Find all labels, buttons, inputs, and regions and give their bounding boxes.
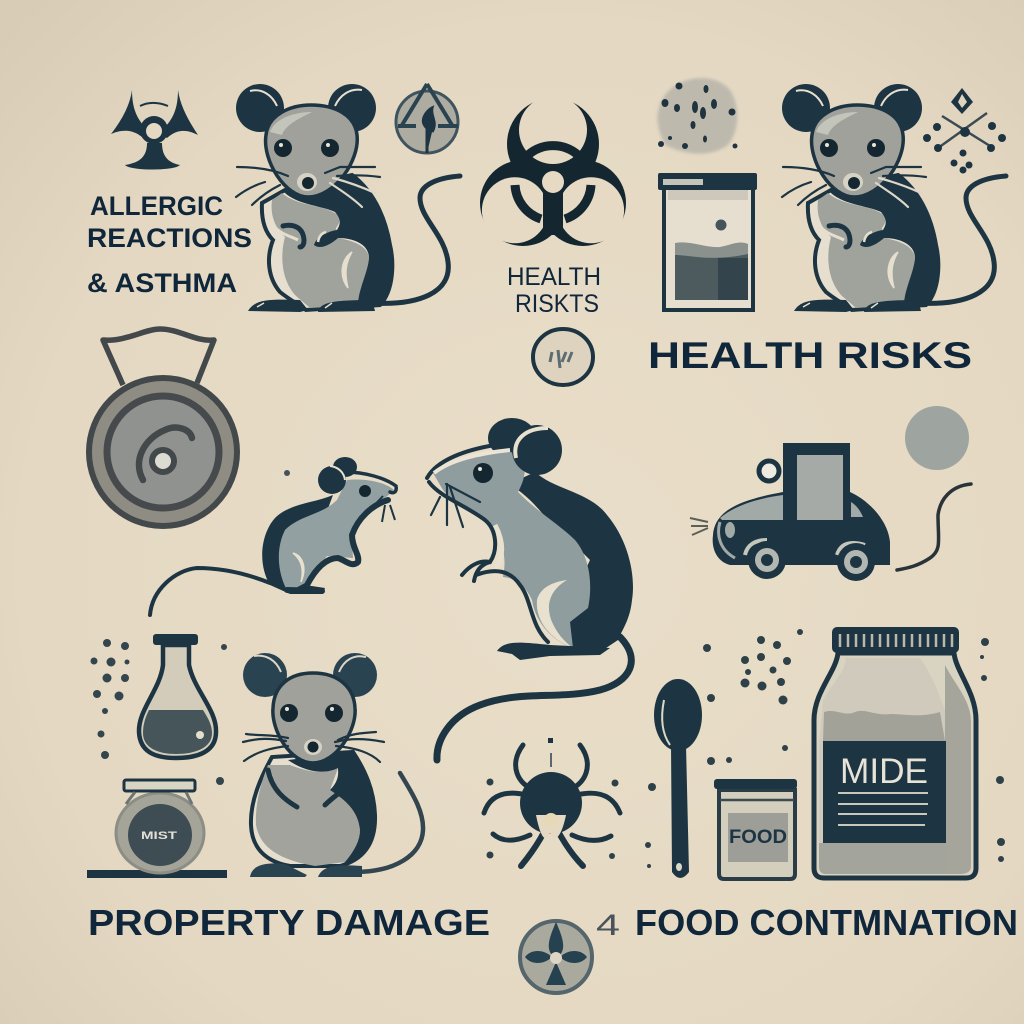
heading: health risks: HEALTH RISKS	[648, 335, 972, 376]
mouse: bottom left	[243, 653, 423, 877]
icon: small round badge	[533, 329, 593, 385]
heading: allergic reactions and asthma: & ASTHMA	[87, 268, 237, 298]
icon: bottom fan badge	[520, 921, 592, 993]
text: number four: 4	[596, 909, 620, 942]
icon: large biohazard symbol	[480, 102, 626, 246]
icon: speckled cloud	[658, 78, 738, 154]
text: health risks small: RISKTS	[515, 290, 599, 318]
mouse: top left	[236, 84, 460, 312]
speck	[284, 470, 290, 476]
icon: tick hazard	[484, 738, 620, 866]
heading: allergic reactions and asthma: REACTIONS	[87, 223, 252, 253]
icon: toy car	[690, 443, 890, 581]
heading: property damage: PROPERTY DAMAGE	[88, 902, 490, 943]
text: health risks small: HEALTH	[507, 263, 601, 291]
icon: mist jar	[87, 780, 227, 878]
icon: spoon	[654, 679, 702, 878]
heading: food contamination: FOOD CONTMNATION	[635, 902, 1018, 943]
icon: mist jar: MIST	[141, 830, 177, 842]
arrow: curved line	[897, 484, 971, 570]
heading: allergic reactions and asthma	[87, 191, 252, 298]
icon: specimen jar	[658, 173, 757, 310]
icon: flask	[139, 634, 216, 758]
icon: small hazard symbol	[111, 90, 198, 170]
heading: allergic reactions and asthma: ALLERGIC	[90, 191, 223, 221]
icon: gong	[89, 329, 237, 526]
mouse: large side rat	[427, 418, 633, 760]
icon: grey circle	[905, 406, 969, 470]
mouse: top right	[782, 84, 1006, 312]
icon: food jar: FOOD	[729, 827, 787, 848]
mouse: small side rat	[150, 457, 396, 615]
text: health risks small	[507, 263, 601, 318]
dots: left specks	[90, 639, 227, 785]
dots: centre specks	[486, 629, 1005, 868]
icon: large mide jar	[814, 627, 976, 878]
icon: crossed marks	[923, 88, 1006, 174]
icon: food jar	[714, 779, 797, 879]
icon: circle badge top	[396, 84, 458, 153]
icon: large mide jar: MIDE	[840, 752, 928, 791]
